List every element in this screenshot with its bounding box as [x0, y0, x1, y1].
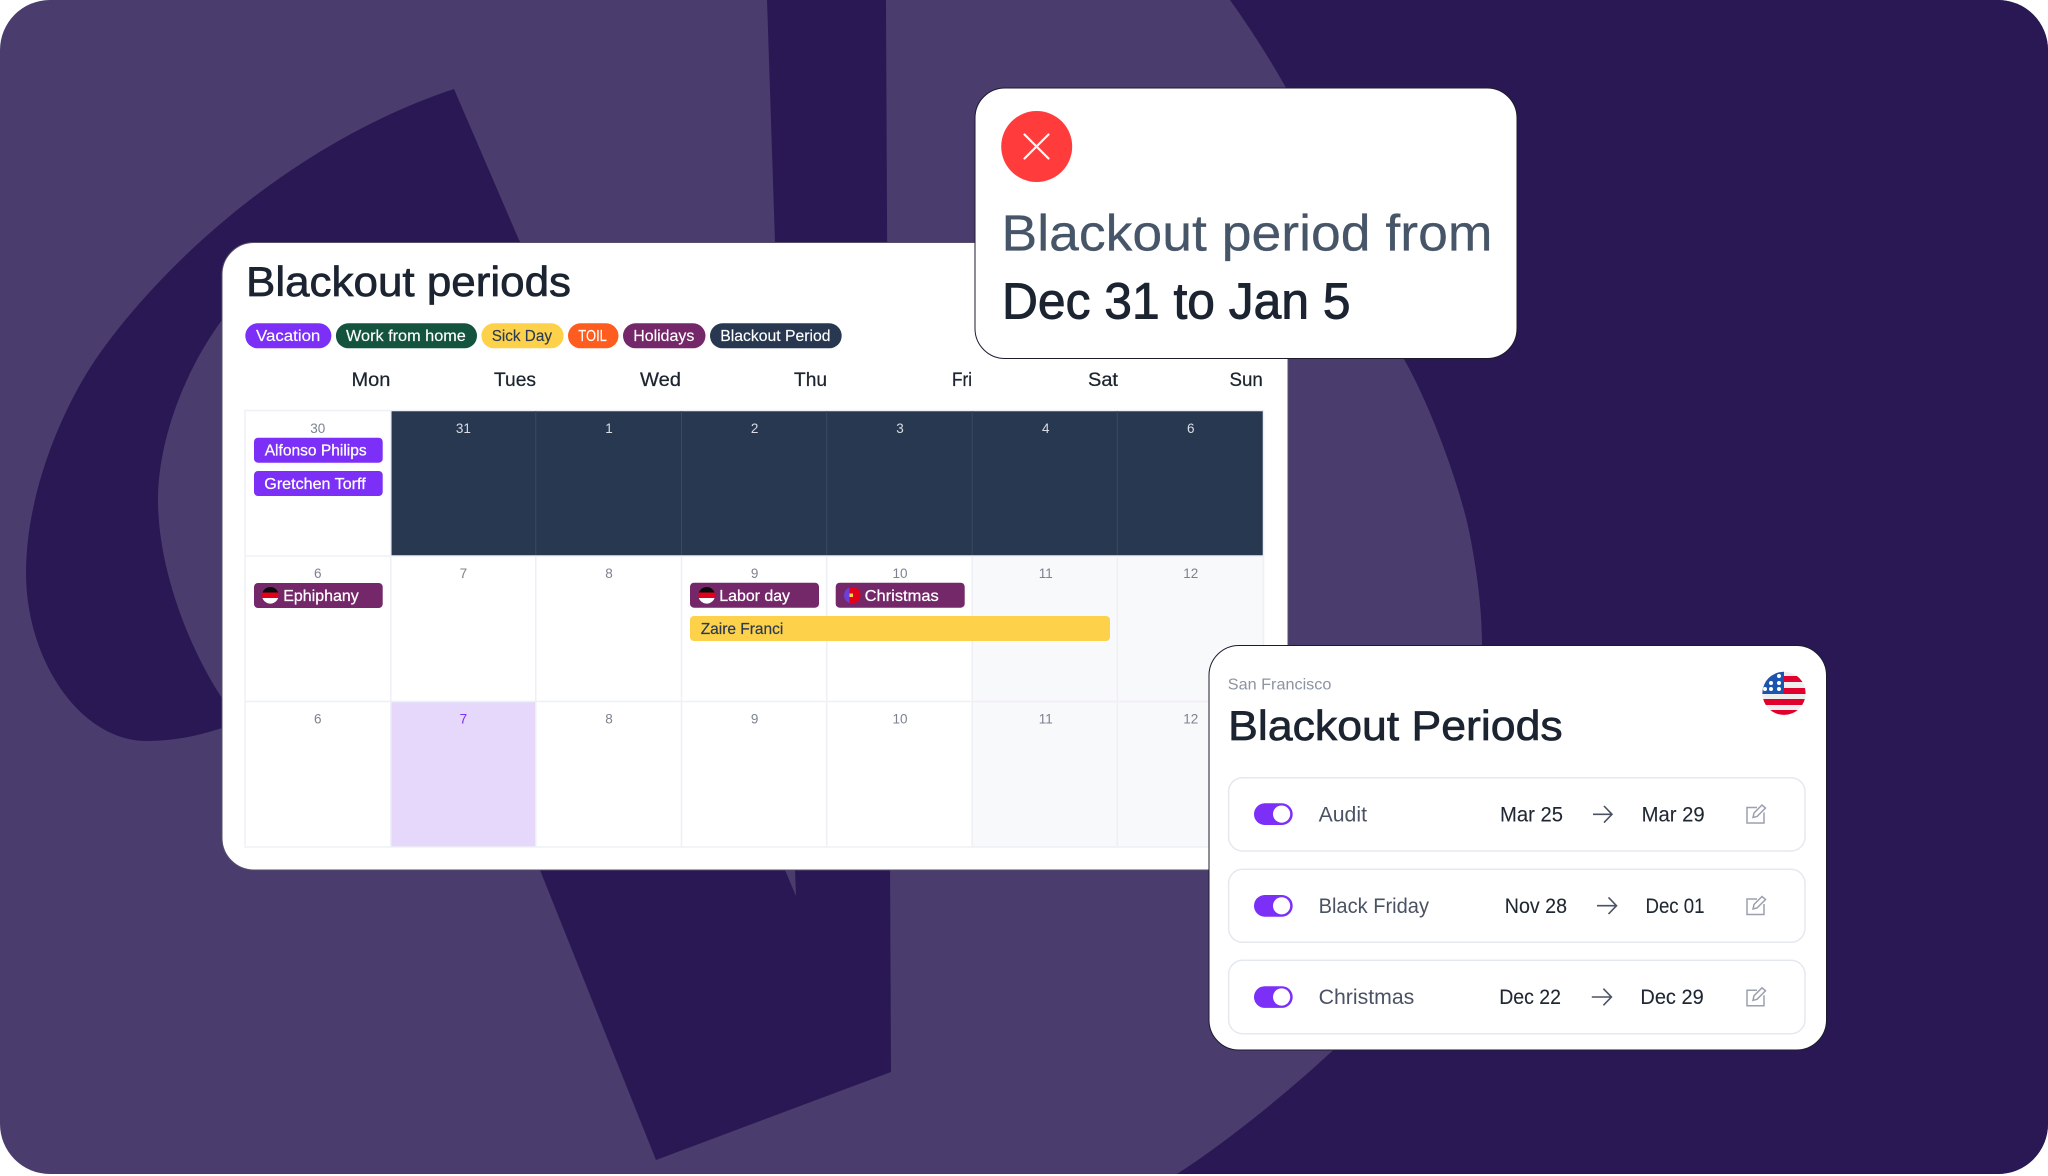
- event: Christmas: [836, 583, 965, 608]
- icon: red cross: [1001, 111, 1072, 182]
- row: Christmas: [1229, 960, 1805, 1034]
- weekday headers: Fri: [952, 370, 972, 391]
- legend pills: Holidays: [633, 328, 694, 345]
- legend pills: [245, 323, 842, 348]
- alert text line 2: Dec 31 to Jan 5: [1002, 272, 1350, 329]
- panel: calendar: [222, 242, 1288, 870]
- legend pills: TOIL: [578, 328, 607, 345]
- event: Christmas: Christmas: [865, 588, 939, 605]
- event: Ephiphany: [254, 583, 383, 608]
- calendar grid: 6: [1187, 421, 1195, 436]
- calendar grid: 10: [892, 712, 908, 726]
- location label: San Francisco: [1228, 676, 1332, 693]
- event: Labor day: Labor day: [719, 588, 790, 605]
- calendar grid: 11: [1039, 566, 1053, 581]
- calendar grid: 1: [605, 421, 613, 436]
- legend pills: Vacation: [256, 328, 320, 345]
- calendar grid: [245, 410, 1264, 847]
- row: Christmas: Christmas: [1319, 985, 1414, 1009]
- calendar grid: 12: [1183, 712, 1198, 726]
- icon: US flag: [1762, 672, 1806, 715]
- panel: San Francisco blackout periods: [1209, 646, 1826, 1050]
- calendar grid: 8: [605, 712, 613, 726]
- event: Labor day: [690, 583, 819, 608]
- event: Gretchen Torff: Gretchen Torff: [264, 476, 366, 493]
- row: Black Friday: Dec 01: [1646, 894, 1704, 918]
- row: Christmas: Dec 29: [1640, 985, 1704, 1009]
- calendar grid: 8: [605, 566, 613, 581]
- row: Audit: Mar 29: [1642, 803, 1705, 827]
- weekday headers: Sat: [1088, 370, 1119, 391]
- event: Zaire Franci: Zaire Franci: [701, 621, 783, 638]
- calendar grid: 9: [751, 712, 758, 726]
- calendar grid: 30: [310, 421, 325, 436]
- calendar grid: 7: [460, 712, 467, 726]
- calendar grid: 2: [751, 421, 758, 436]
- row: Black Friday: Nov 28: [1505, 894, 1567, 918]
- legend pills: Work from home: [346, 328, 466, 345]
- event: Alfonso Philips: [254, 438, 383, 463]
- alert text line 1: Blackout period from: [1002, 204, 1492, 261]
- row: Audit: [1229, 778, 1805, 851]
- row: Christmas: Dec 22: [1499, 985, 1561, 1009]
- event: Alfonso Philips: Alfonso Philips: [265, 442, 367, 460]
- calendar grid: 6: [314, 712, 322, 726]
- event: Gretchen Torff: [254, 471, 383, 496]
- row: Black Friday: Black Friday: [1319, 894, 1429, 918]
- weekday headers: Tues: [494, 370, 536, 391]
- calendar grid: 11: [1039, 712, 1053, 726]
- calendar grid: 12: [1183, 566, 1198, 581]
- heading: Blackout periods: Blackout periods: [246, 258, 571, 305]
- weekday headers: Thu: [794, 370, 827, 391]
- event: Zaire Franci: [690, 616, 1110, 641]
- calendar grid: 3: [896, 421, 904, 436]
- calendar grid: 31: [456, 421, 471, 436]
- row: Audit: Audit: [1319, 803, 1367, 827]
- weekday headers: Mon: [352, 370, 390, 391]
- calendar grid: 9: [751, 566, 758, 581]
- calendar grid: 7: [460, 566, 467, 581]
- calendar grid: 6: [314, 566, 322, 581]
- weekday headers: Sun: [1230, 370, 1263, 391]
- legend pills: Sick Day: [492, 328, 552, 345]
- row: Black Friday: [1229, 869, 1805, 942]
- row: Audit: Mar 25: [1500, 803, 1563, 827]
- calendar grid: 4: [1042, 421, 1050, 436]
- panel: blackout alert: [975, 88, 1517, 358]
- legend pills: Blackout Period: [720, 328, 830, 345]
- heading: Blackout Periods: Blackout Periods: [1228, 702, 1563, 749]
- calendar grid: 10: [892, 566, 908, 581]
- weekday headers: Wed: [640, 370, 681, 391]
- weekday headers: [352, 370, 1263, 391]
- event: Ephiphany: Ephiphany: [283, 588, 359, 605]
